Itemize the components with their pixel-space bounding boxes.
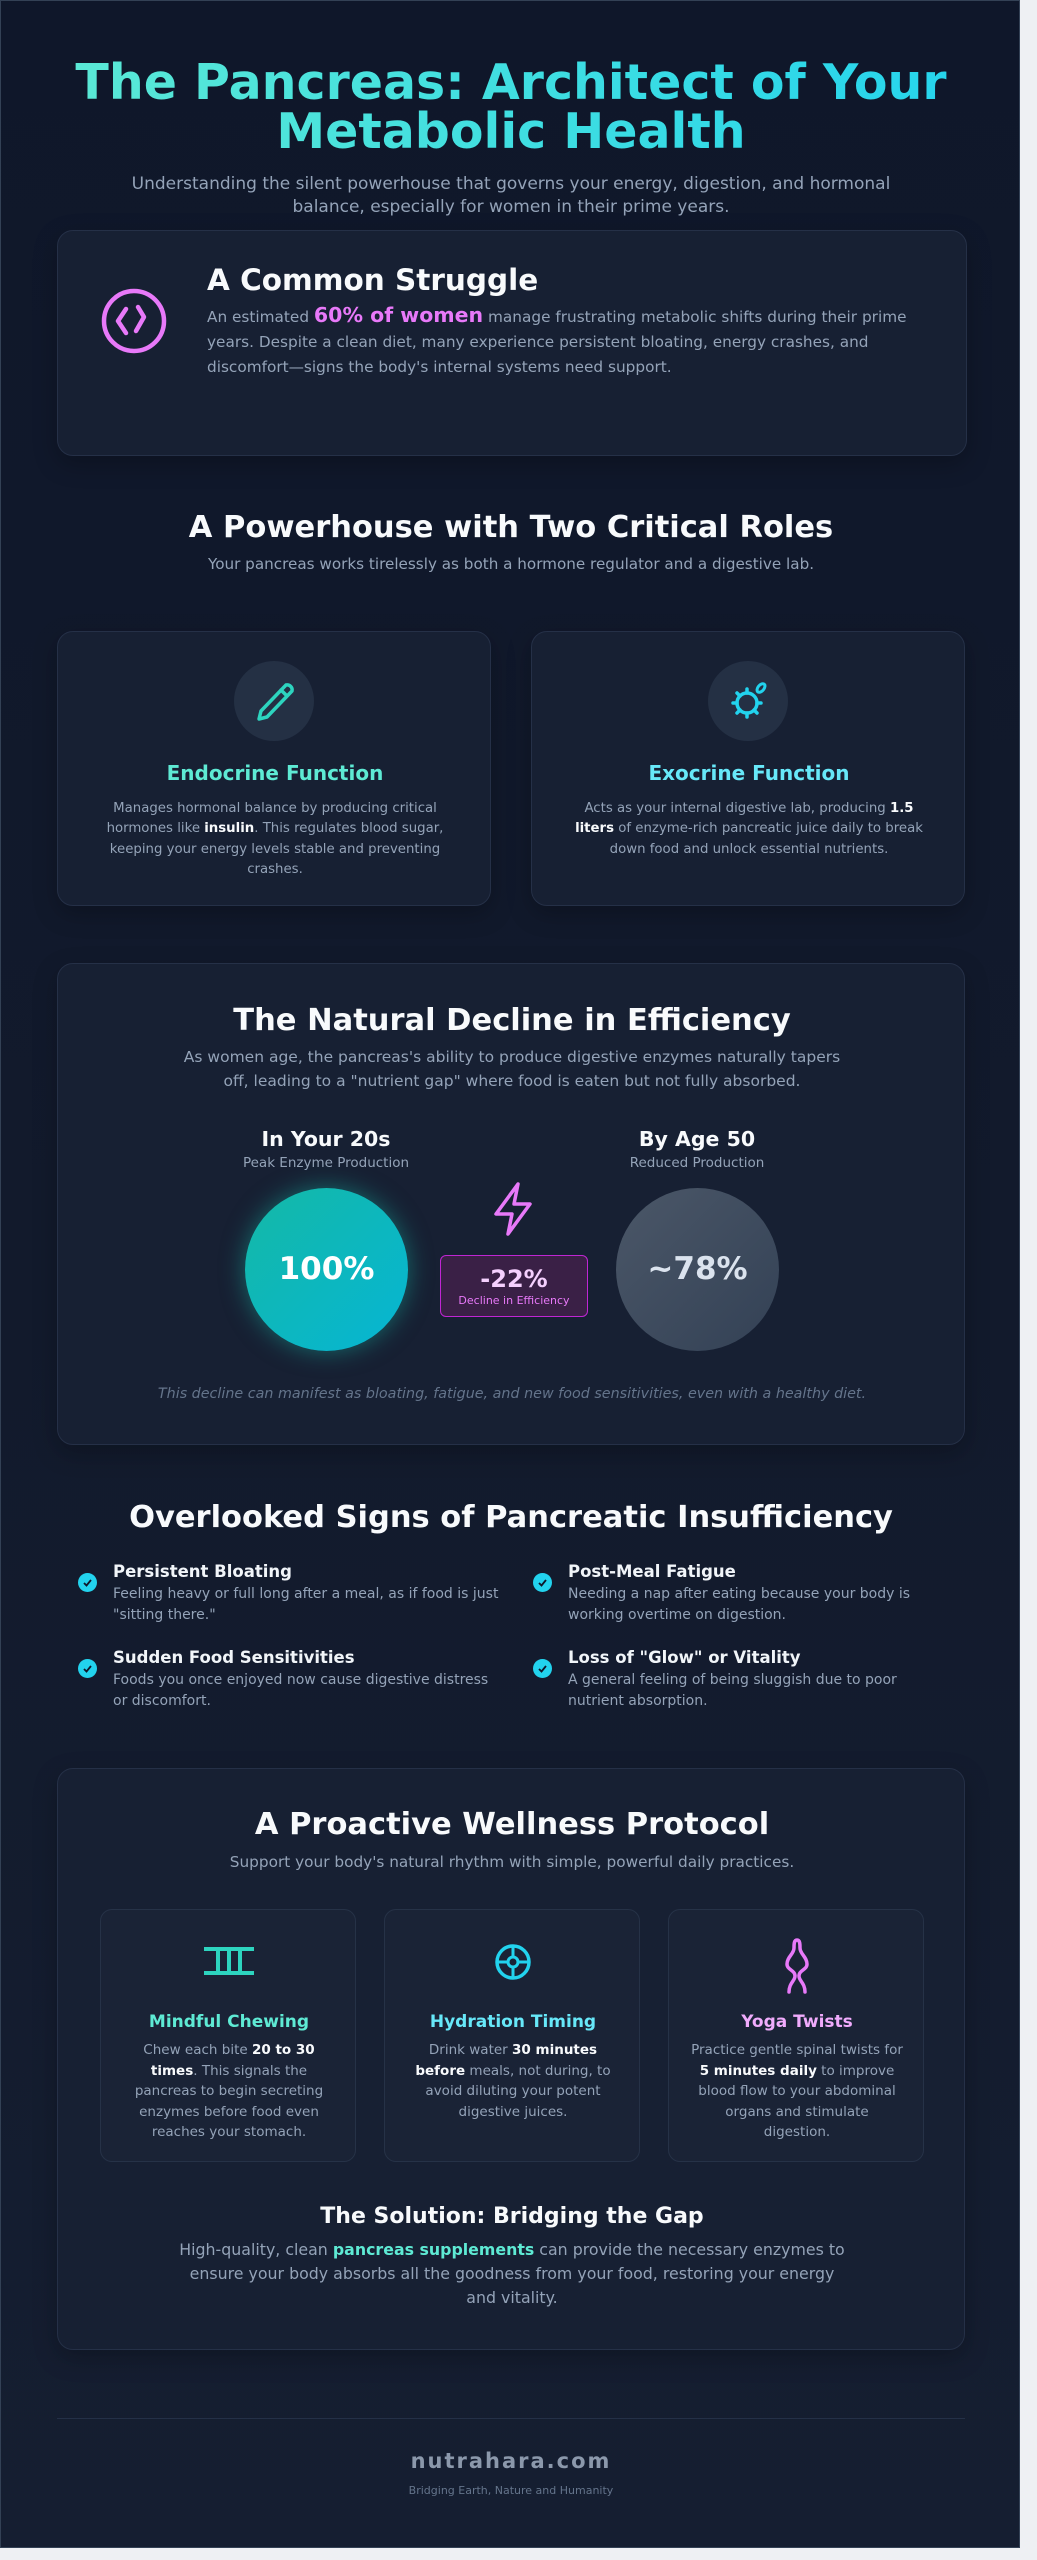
list: signs	[78, 1562, 910, 1709]
sign: bloating	[78, 1562, 498, 1623]
heading: A Proactive Wellness Protocol	[255, 1807, 769, 1842]
card: yoga: Yoga Twists	[741, 2012, 853, 2032]
title	[1, 58, 1021, 156]
card: chewing: Chew each bite 20 to 30 times. This signals the pancreas to begin secreting enzymes before food even reaches your stomach.	[135, 2042, 323, 2140]
text: As women age, the pancreas's ability to produce digestive enzymes naturally tapers off, leading to a "nutrient gap" where food is eaten but not fully absorbed.	[184, 1048, 840, 1090]
subtitle: Support your body's natural rhythm with simple, powerful daily practices.	[230, 1853, 794, 1871]
heading: A Common Struggle	[207, 263, 538, 297]
title: The Pancreas: Architect of Your	[75, 54, 947, 111]
card: yoga	[668, 1909, 924, 2162]
badge: -22%: Decline in Efficiency	[458, 1294, 570, 1307]
title: Metabolic Health	[276, 103, 746, 160]
sign: vitality: nutrient absorption.	[568, 1693, 708, 1709]
panel: exocrine	[531, 631, 965, 906]
label: age 50: By Age 50	[639, 1127, 755, 1151]
title: Endocrine Function	[167, 761, 383, 785]
subtitle: Understanding the silent powerhouse that governs your energy, digestion, and hormonal balance, especially for women in their prime years.	[132, 174, 890, 217]
heading: signs: Overlooked Signs of Pancreatic Insufficiency	[129, 1500, 893, 1535]
footer: Bridging Earth, Nature and Humanity	[409, 2484, 613, 2497]
panel: endocrine	[57, 631, 491, 906]
badge: -22%	[440, 1255, 588, 1317]
sign: fatigue: Post-Meal Fatigue	[568, 1562, 736, 1581]
label: 20s: In Your 20s	[262, 1127, 390, 1151]
footer: nutrahara.com	[411, 2449, 611, 2473]
card: chewing	[100, 1909, 356, 2162]
heading: The Natural Decline in Efficiency	[233, 1003, 791, 1038]
label: 20s	[243, 1127, 409, 1171]
panel: common struggle	[57, 230, 967, 456]
text: Acts as your internal digestive lab, producing 1.5 liters of enzyme-rich pancreatic juice daily to break down food and unlock essential nutrients.	[575, 801, 923, 857]
sign: fatigue: working overtime on digestion.	[568, 1607, 786, 1623]
icon: cycle circle	[102, 288, 166, 354]
panel: protocol	[57, 1768, 965, 2350]
text: solution: ensure your body absorbs all the goodness from your food, restoring your energy	[190, 2264, 834, 2283]
card: hydration	[384, 1909, 640, 2162]
text: solution	[179, 2240, 845, 2307]
sign: vitality	[533, 1648, 897, 1709]
heading: two roles: A Powerhouse with Two Critical Roles	[189, 510, 833, 545]
label: age 50: Reduced Production	[630, 1155, 764, 1171]
panel: decline	[57, 963, 965, 1445]
chart: 78% circle: ~78%	[647, 1251, 748, 1287]
sign: sensitivities: Sudden Food Sensitivities	[113, 1648, 355, 1667]
footer	[409, 2449, 613, 2497]
card: hydration: Drink water 30 minutes before meals, not during, to avoid diluting your potent digestive juices.	[415, 2042, 611, 2120]
sign: bloating: Persistent Bloating	[113, 1562, 292, 1581]
heading: solution: The Solution: Bridging the Gap	[320, 2204, 704, 2229]
subtitle: two roles: Your pancreas works tirelessly as both a hormone regulator and a digestive lab.	[208, 555, 814, 573]
sign: fatigue	[533, 1562, 910, 1623]
text block: An estimated 60% of women manage frustrating metabolic shifts during their prime years. Despite a clean diet, many experience persistent bloating, energy crashes, and discomfort—signs the body's internal systems need support.	[207, 303, 907, 376]
note: This decline can manifest as bloating, fatigue, and new food sensitivities, even with a healthy diet.	[158, 1386, 866, 1402]
text: solution: High-quality, clean pancreas supplements can provide the necessary enzymes to	[179, 2240, 845, 2259]
sign: vitality: Loss of "Glow" or Vitality	[568, 1648, 801, 1667]
icon: yoga	[785, 1938, 809, 1994]
chart: 100% circle	[245, 1188, 408, 1351]
sign: sensitivities	[78, 1648, 488, 1709]
icon: chewing	[204, 1947, 254, 1975]
card: chewing: Mindful Chewing	[149, 2012, 309, 2032]
icon: pencil	[234, 661, 314, 741]
sign: bloating: "sitting there."	[113, 1607, 216, 1623]
label: age 50	[630, 1127, 764, 1171]
sign: vitality: A general feeling of being sluggish due to poor	[568, 1672, 897, 1688]
chart: 100% circle: 100%	[279, 1251, 374, 1287]
icon: lightning	[494, 1182, 532, 1236]
chart: 78% circle	[616, 1188, 779, 1351]
sign: fatigue: Needing a nap after eating because your body is	[568, 1586, 910, 1602]
text: solution: and vitality.	[466, 2288, 558, 2307]
label: 20s: Peak Enzyme Production	[243, 1155, 409, 1171]
sign: sensitivities: or discomfort.	[113, 1693, 211, 1709]
text: Manages hormonal balance by producing critical hormones like insulin. This regulates blood sugar, keeping your energy levels stable and preventing crashes.	[107, 801, 443, 877]
card: yoga: Practice gentle spinal twists for 5 minutes daily to improve blood flow to your abdominal organs and stimulate digestion.	[691, 2042, 903, 2140]
icon: lifebuoy	[495, 1944, 531, 1980]
sign: bloating: Feeling heavy or full long after a meal, as if food is just	[113, 1586, 498, 1602]
icon: microbe	[708, 661, 788, 741]
title: Exocrine Function	[648, 761, 850, 785]
card: hydration: Hydration Timing	[430, 2012, 596, 2032]
badge: -22%: -22%	[480, 1265, 548, 1293]
sign: sensitivities: Foods you once enjoyed now cause digestive distress	[113, 1672, 488, 1688]
